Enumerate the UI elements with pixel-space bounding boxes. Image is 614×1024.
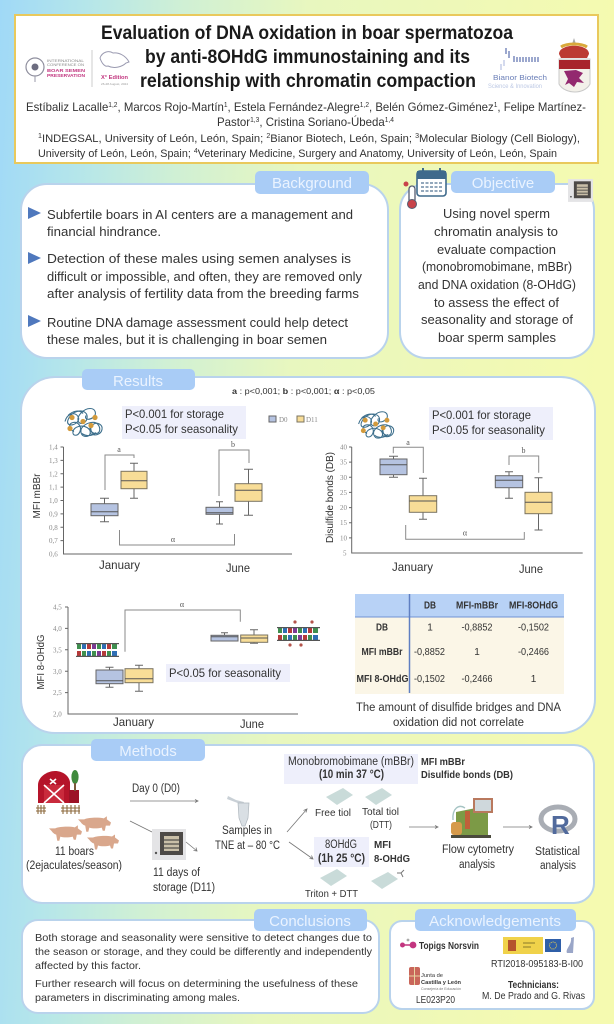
table row: DB: -0,8852 (462, 622, 493, 634)
tiol labels: Total tiol (362, 807, 399, 818)
objective text: (monobromobimane, mBBr) (422, 259, 572, 274)
bullet: routine DNA damage: these males, but it is challenging in boar semen (47, 333, 327, 347)
authors: 1 (224, 102, 228, 109)
logo: Junta de Castilla y León: Junta de (421, 973, 443, 979)
table row: MFI mBBr: -0,8852 (414, 647, 445, 658)
logo: Topigs Norsvin: Topigs Norsvin (419, 941, 479, 952)
authors: 1,2 (108, 102, 118, 109)
affiliations: INDEGSAL, University of León, León, Spain; (42, 133, 266, 145)
conclusion text 2 (35, 978, 358, 1004)
heading: methods (91, 739, 205, 761)
logo: Junta de Castilla y León: Castilla y León (421, 980, 461, 986)
icon: chromatin network (65, 408, 102, 436)
heading: background: Background (272, 175, 352, 192)
authors: 1 (494, 102, 497, 109)
category labels: January (99, 558, 140, 572)
authors: 1,2 (360, 102, 369, 109)
table row: MFI mBBr (362, 647, 549, 658)
affiliations: Molecular Biology (Cell Biology), (419, 133, 580, 145)
category labels (99, 558, 250, 575)
axes: 1,2 (49, 470, 58, 478)
authors: , Cristina Soriano-Úbeda (259, 114, 385, 129)
logo: Junta de Castilla y León: Consejería de Educación (421, 987, 461, 991)
arrow: boars to incubator (130, 821, 152, 832)
bracket: α (180, 600, 185, 609)
table row: DB: -0,1502 (518, 622, 549, 634)
axes: 4,0 (53, 625, 62, 633)
objective text (418, 206, 576, 345)
triton label: Triton + DTT (305, 889, 358, 900)
brackets: α (463, 528, 468, 538)
category labels (113, 715, 264, 731)
legend (269, 416, 318, 424)
chart: MFI mBBr box plot (31, 406, 318, 575)
logo: Bianor Biotech: Science & Innovation (488, 84, 542, 90)
mBBr outputs: MFI mBBr (421, 756, 465, 768)
icon: R logo: R (551, 810, 570, 840)
bullet: routine DNA damage (28, 315, 349, 347)
logo: Bianor Biotech: Bianor Biotech (493, 73, 547, 82)
icon: intact DNA (76, 643, 119, 657)
affiliations: 4 (194, 148, 198, 155)
logo: boar semen conference: 26-28 August, 2024 (101, 82, 128, 86)
logo: boar semen conference: PRESERVATION (47, 73, 86, 78)
affiliations: Veterinary Medicine, Surgery and Anatomy, University of León, León, Spain (198, 148, 557, 160)
box: January D11 (121, 463, 147, 498)
logo: boar semen conference: X° Edition (101, 75, 128, 81)
technicians (482, 980, 585, 1002)
authors: , Marcos Rojo-Martín (118, 100, 224, 114)
table caption: oxidation did not correlate (393, 717, 524, 729)
affiliations: 2 (266, 133, 270, 140)
table row: MFI 8-OHdG (356, 674, 537, 685)
title: Evaluation of DNA oxidation in boar spermatozoa (101, 23, 513, 44)
table header row: MFI-8OHdG (509, 600, 558, 612)
mBBr outputs: Disulfide bonds (DB) (421, 769, 513, 781)
brackets: b (522, 446, 526, 455)
tiol labels (315, 807, 399, 831)
y axis title: MFI mBBr (31, 473, 43, 518)
conclusion text 1: affected by this factor. (35, 960, 141, 972)
cytometry label: Flow cytometry (442, 844, 514, 856)
axes: 1,4 (49, 444, 58, 452)
logo: boar semen conference: CONFERENCE ON (47, 63, 84, 67)
panel: objective (400, 168, 594, 358)
heading: acknowledgements: Acknowledgements (429, 913, 561, 930)
affiliations (38, 133, 580, 160)
statistics label (535, 846, 580, 872)
technicians: M. De Prado and G. Rivas (482, 991, 585, 1002)
heading: objective: Objective (472, 175, 534, 192)
axes: 35 (340, 458, 348, 466)
axes: 0,6 (49, 550, 58, 558)
icon: plates with antibody (320, 869, 404, 889)
authors: Estíbaliz Lacalle (26, 100, 113, 114)
table caption (356, 702, 561, 729)
bullet: subfertile boars: Subfertile boars in AI centers are a management and (47, 208, 353, 222)
category labels (392, 560, 543, 576)
heading: background (255, 171, 369, 194)
authors: , Belén Gómez-Giménez (369, 100, 494, 114)
affiliations: University of León, León, Spain; (38, 148, 194, 160)
objective text: and DNA oxidation (8-OHdG) (418, 277, 576, 292)
icon: chromatin network (359, 412, 394, 438)
arrow: assay to cytometer (409, 826, 438, 828)
logo: boar semen conference: INTERNATIONAL (47, 59, 84, 63)
callout: p values (429, 407, 553, 440)
conclusion text 1: the season or storage, and they could be differently and independently (35, 946, 373, 958)
box: January D11 (125, 665, 153, 691)
brackets: a (406, 438, 410, 447)
callout: p values: P<0.05 for seasonality (125, 422, 238, 436)
objective text: to assess the effect of (434, 295, 559, 310)
bullet: routine DNA damage: Routine DNA damage assessment could help detect (47, 316, 349, 330)
category labels: January (113, 715, 154, 729)
box: June D0 (211, 633, 238, 641)
table row: MFI 8-OHdG: -0,2466 (462, 674, 493, 685)
title (101, 23, 513, 92)
axes (340, 444, 583, 558)
bracket (125, 600, 240, 652)
logo: university shield (559, 38, 590, 92)
box: January D0 (91, 498, 118, 522)
box: January D0 (96, 667, 123, 687)
heading: results: Results (113, 373, 163, 390)
grant code: LE023P20 (416, 995, 455, 1006)
axes: 1,1 (49, 484, 58, 492)
conclusion text 1: Both storage and seasonality were sensitive to detect changes due to (35, 932, 372, 944)
axes: 2,5 (53, 689, 62, 697)
authors: 1,3 (250, 117, 259, 124)
axes: 0,9 (49, 510, 58, 518)
authors: , Estela Fernández-Alegre (228, 100, 360, 114)
mBBr assay box: (10 min 37 °C) (319, 769, 384, 781)
tiol labels: Free tiol (315, 808, 351, 819)
authors: Pastor (217, 115, 252, 129)
category labels: June (240, 717, 264, 731)
axes (53, 604, 298, 718)
storage label: 11 days of (153, 867, 201, 879)
arrow: incubator to samples (186, 842, 197, 851)
y axis title: MFI 8-OHdG (35, 634, 47, 690)
storage label: storage (D11) (153, 882, 215, 894)
table caption: The amount of disulfide bridges and DNA (356, 702, 561, 714)
callout: seasonality: P<0.05 for seasonality (169, 666, 281, 680)
category labels: January (392, 560, 433, 574)
icon: pigs (49, 816, 119, 850)
panel: title header (15, 15, 598, 163)
bullet: subfertile boars: financial hindrance. (47, 225, 161, 239)
icon: incubator (568, 179, 593, 202)
callout: p values: P<0.05 for seasonality (432, 423, 545, 437)
callout: p values (122, 406, 246, 439)
legend: D0 (279, 416, 288, 424)
conclusion text 2: parameters in discriminating among males. (35, 992, 240, 1004)
logos: funding agencies (503, 937, 574, 954)
table header row (424, 600, 558, 612)
arrow: day 0 to samples (130, 800, 198, 802)
logo: boar semen conference (26, 50, 129, 87)
axes: 15 (340, 519, 348, 527)
axes: 25 (340, 489, 348, 497)
authors: 1,4 (385, 117, 394, 124)
panel: acknowledgements (390, 909, 594, 1009)
panel: background (21, 171, 388, 358)
title: relationship with chromatin compaction (140, 71, 476, 92)
objective text: boar sperm samples (438, 330, 556, 345)
objective text: chromatin analysis to (434, 224, 558, 239)
authors: , Felipe Martínez- (497, 100, 586, 114)
brackets (105, 440, 249, 545)
table row: DB: 1 (427, 622, 433, 634)
table header row: MFI-mBBr (456, 600, 498, 612)
bullet: detection (28, 252, 363, 301)
samples label: TNE at – 80 °C (215, 840, 280, 852)
y axis title: Disulfide bonds (DB) (324, 452, 336, 543)
8OHdG assay box (314, 837, 369, 867)
day 0 label: Day 0 (D0) (132, 783, 180, 795)
arrow: samples to mBBr (287, 809, 307, 832)
brackets: α (171, 535, 176, 544)
logo: boar semen conference: BOAR SEMEN (47, 68, 86, 73)
axes: 1,3 (49, 457, 58, 465)
box: January D0 (380, 456, 407, 477)
logo: Bianor Biotech (488, 48, 547, 90)
correlation table (355, 594, 564, 694)
box: June D11 (241, 630, 268, 643)
bullet: detection: difficult or impossible, and often, they are removed only (47, 270, 363, 284)
axes: 0,7 (49, 537, 58, 545)
table row: DB (376, 622, 549, 634)
heading: results (82, 369, 195, 390)
icon: thermometer (404, 182, 416, 208)
category labels: June (226, 561, 250, 575)
axes: 30 (340, 474, 348, 482)
heading: objective (451, 171, 555, 193)
callout: p values: P<0.001 for storage (125, 407, 224, 421)
8OHdG assay box: 8OHdG (325, 839, 357, 851)
heading: acknowledgements (415, 909, 576, 931)
8OHdG outputs (374, 839, 410, 865)
icon: oxidized DNA (277, 620, 320, 647)
samples label (215, 825, 280, 852)
table row: MFI 8-OHdG: MFI 8-OHdG (356, 674, 409, 685)
cytometry label: analysis (459, 859, 495, 871)
bullet: subfertile boars (28, 207, 353, 239)
boars label: (2ejaculates/season) (26, 860, 122, 872)
affiliations: 3 (415, 133, 419, 140)
table row: MFI 8-OHdG: -0,1502 (414, 674, 445, 685)
8OHdG outputs: MFI (374, 839, 391, 851)
objective text: seasonality and storage of (421, 312, 573, 327)
box: January D11 (409, 478, 437, 519)
chart: MFI 8-OHdG box plot (35, 600, 320, 731)
objective text: evaluate compaction (437, 242, 556, 257)
logo: Topigs Norsvin (400, 939, 479, 952)
table row: MFI 8-OHdG: 1 (531, 674, 537, 685)
tiol labels: (DTT) (370, 820, 392, 831)
axes: 40 (340, 444, 348, 452)
category labels: June (519, 562, 543, 576)
brackets: a (117, 445, 121, 454)
axes: 3,5 (53, 646, 62, 654)
statistics label: Statistical (535, 846, 580, 858)
icon: incubator (152, 829, 186, 860)
title: by anti-8OHdG immunostaining and its (145, 47, 470, 68)
affiliations: 1 (38, 133, 42, 140)
icon: barn (36, 770, 80, 814)
axes: 4,5 (53, 604, 62, 612)
brackets: b (231, 440, 235, 449)
statistics label: analysis (540, 860, 576, 872)
callout: p values: P<0.001 for storage (432, 408, 531, 422)
8OHdG assay box: (1h 25 °C) (318, 853, 365, 865)
icon: plates free and total tiol (326, 788, 392, 805)
table header row: DB (424, 600, 436, 612)
axes: 20 (340, 504, 348, 512)
chart: disulfide bonds box plot (324, 407, 583, 576)
affiliations: Bianor Biotech, León, Spain; (270, 133, 415, 145)
authors (26, 100, 586, 129)
8OHdG outputs: 8-OHdG (374, 853, 410, 865)
axes: 5 (343, 550, 347, 558)
heading: conclusions (254, 909, 367, 931)
axes: 3,0 (53, 668, 62, 676)
samples label: Samples in (222, 825, 272, 837)
cytometry label (442, 844, 514, 871)
panel: methods (22, 739, 594, 903)
objective text: Using novel sperm (443, 206, 550, 221)
mBBr assay box (284, 754, 418, 784)
significance key: a : p<0,001; b : p<0,001; α : p<0,05 (232, 386, 375, 396)
axes (49, 444, 292, 558)
logo: Junta de Castilla y León (409, 967, 461, 991)
technicians: Technicians: (508, 980, 559, 991)
mBBr assay box: Monobromobimane (mBBr) (288, 756, 414, 768)
icon: flow cytometer (451, 798, 493, 838)
icon: calendar (417, 168, 446, 196)
bullet: detection: Detection of these males using semen analyses is (47, 252, 351, 266)
icon: R logo (541, 807, 575, 840)
box: June D0 (206, 502, 233, 524)
storage label (153, 867, 215, 894)
boars label: 11 boars (55, 846, 94, 858)
arrow: cytometer to statistics (503, 826, 532, 828)
heading: methods: Methods (119, 743, 177, 760)
axes: 1,0 (49, 497, 58, 505)
boars label (26, 846, 122, 872)
axes: 2,0 (53, 710, 62, 718)
brackets (393, 438, 539, 539)
axes: 10 (340, 534, 348, 542)
arrow: samples to 8OHdG (289, 842, 313, 859)
box: June D11 (525, 478, 552, 530)
heading: conclusions: Conclusions (269, 913, 351, 930)
conclusion text 1 (35, 932, 373, 972)
table row: DB: DB (376, 622, 388, 634)
bullet: detection: after analysis of fertility data from the breeding farms (47, 287, 359, 301)
grant number: RTI2018-095183-B-I00 (491, 959, 583, 970)
mBBr outputs (421, 756, 513, 781)
table row: MFI mBBr: -0,2466 (518, 647, 549, 658)
legend: D11 (306, 416, 318, 424)
box: June D11 (235, 469, 262, 515)
panel: conclusions (22, 909, 379, 1013)
table row: MFI mBBr: 1 (474, 647, 480, 658)
axes: 0,8 (49, 524, 58, 532)
box: June D0 (495, 472, 523, 498)
conclusion text 2: Further research will focus on determining the usefulness of these (35, 978, 358, 990)
icon: sample tube (227, 796, 249, 826)
table row: MFI mBBr: MFI mBBr (362, 647, 403, 658)
panel: results (21, 369, 595, 733)
